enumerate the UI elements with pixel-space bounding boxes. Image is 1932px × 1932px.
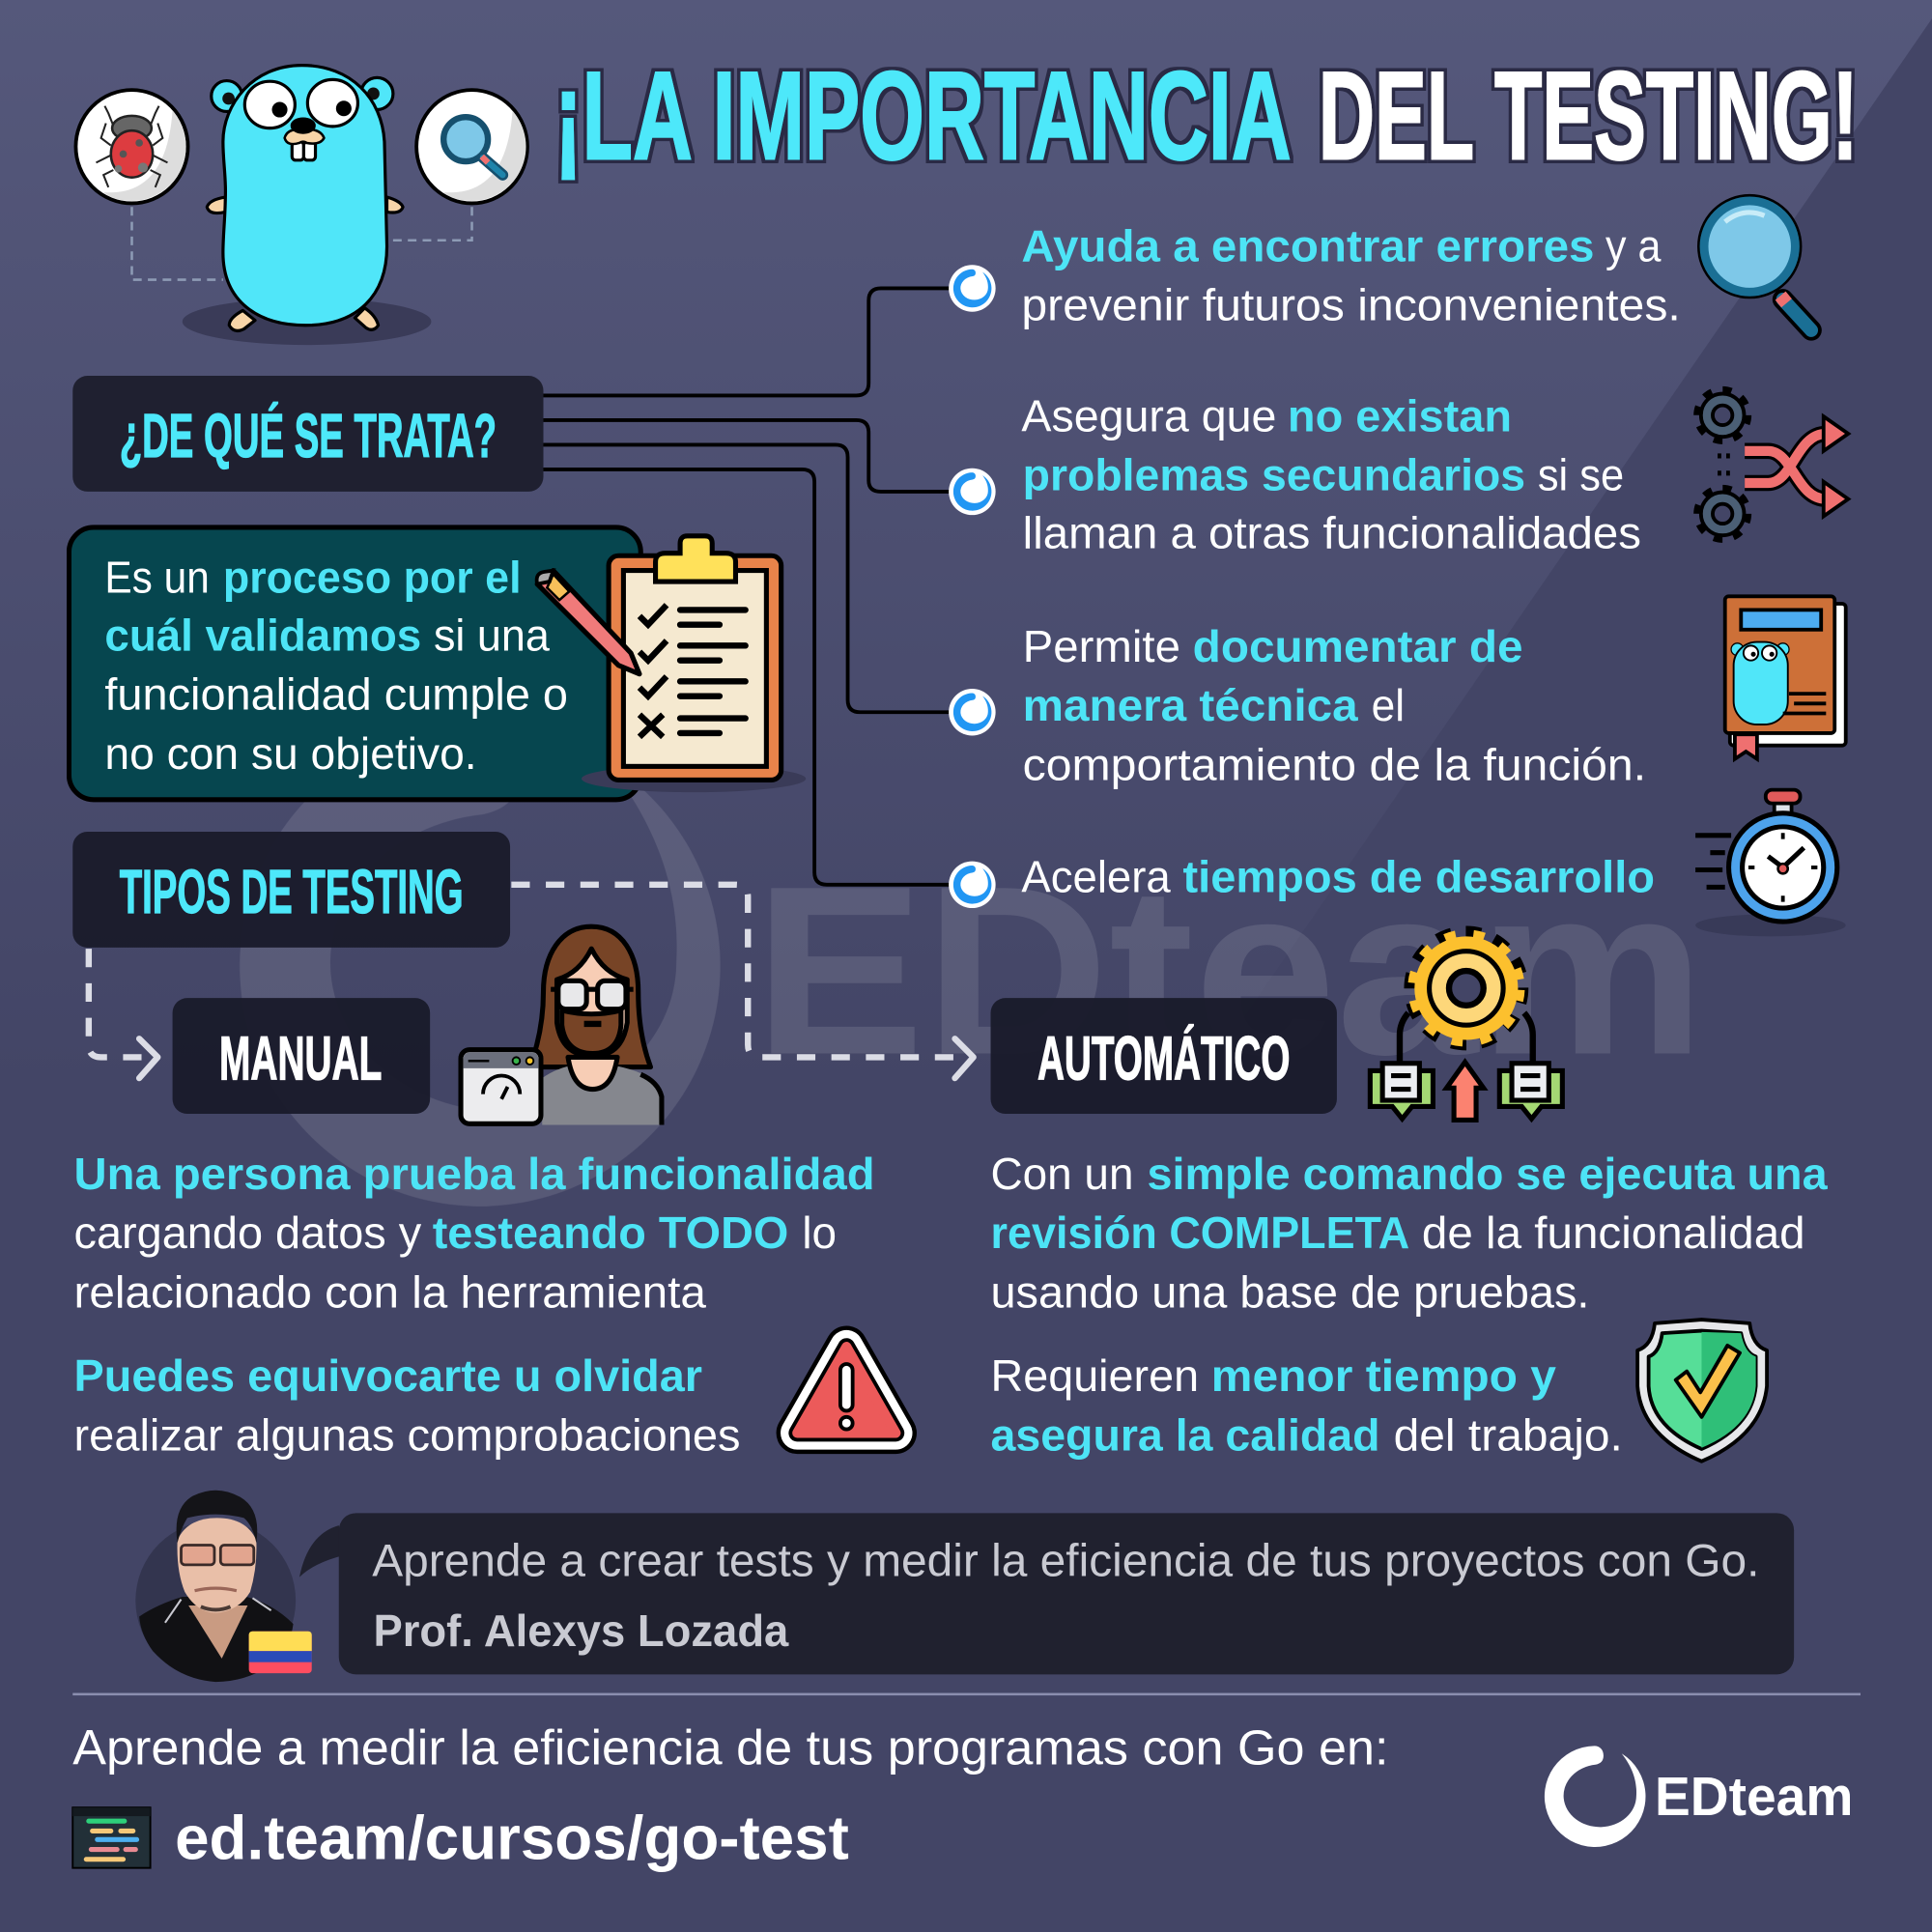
panel: definition: no con su objetivo. xyxy=(104,728,477,779)
text: manual description xyxy=(74,1149,875,1317)
logo: EDteam: EDteam xyxy=(1655,1766,1853,1827)
text: benefit 2: no existan xyxy=(1288,390,1512,440)
heading: tipos de testing: TIPOS DE TESTING xyxy=(120,857,464,926)
text: benefit 1: Ayuda a encontrar errores xyxy=(1021,220,1595,270)
panel: definition: proceso por el xyxy=(223,553,522,603)
connector lines xyxy=(543,288,952,885)
text: automatic description: simple comando se ejecuta una xyxy=(1148,1149,1828,1199)
text: automatic benefit: Requieren xyxy=(991,1350,1199,1401)
text: manual description: cargando datos y xyxy=(74,1208,421,1258)
heading: tipos de testing xyxy=(72,832,510,948)
icon: code window xyxy=(72,1807,151,1868)
bullets xyxy=(949,265,996,908)
icon: shield with check xyxy=(1637,1320,1767,1462)
panel: definition: cuál validamos xyxy=(104,610,421,660)
heading: automático xyxy=(991,998,1337,1114)
text: benefit 3: comportamiento de la función. xyxy=(1023,739,1646,789)
title: ¡LA IMPORTANCIA xyxy=(554,45,1292,186)
text: manual description: testeando TODO xyxy=(433,1208,788,1258)
text: benefit 2: si se xyxy=(1538,450,1624,500)
icon: magnifier in circle xyxy=(416,90,527,203)
text: automatic description: usando una base de pruebas. xyxy=(991,1266,1589,1317)
icon: bug in circle xyxy=(75,90,188,203)
text: manual description: Una persona prueba la funcionalidad xyxy=(74,1149,875,1199)
text: manual description: lo xyxy=(802,1208,837,1258)
text: benefit 1: y a xyxy=(1605,220,1662,270)
course link: ed.team/cursos/go-test xyxy=(175,1804,849,1873)
text: manual description: relacionado con la herramienta xyxy=(74,1266,706,1317)
text: benefit 2: llaman a otras funcionalidades xyxy=(1023,508,1641,558)
icon: magnifier xyxy=(1699,196,1811,330)
text: benefit 3: el xyxy=(1372,680,1405,730)
text: benefit 4: tiempos de desarrollo xyxy=(1182,851,1655,901)
icon: warning triangle xyxy=(797,1347,895,1433)
text: manual risk: Puedes equivocarte u olvidar xyxy=(74,1350,702,1401)
text: benefit 3: manera técnica xyxy=(1023,680,1358,730)
heading: de qué se trata: ¿DE QUÉ SE TRATA? xyxy=(120,401,497,470)
text: benefit 3: Permite xyxy=(1023,621,1180,671)
panel: definition: funcionalidad cumple o xyxy=(104,669,568,720)
callout: professor quote xyxy=(299,1513,1794,1674)
text: manual risk xyxy=(74,1350,741,1460)
avatar: professor xyxy=(135,1491,312,1682)
icon: clipboard with pencil xyxy=(537,536,806,792)
text: automatic benefit xyxy=(991,1350,1623,1460)
text: automatic description: revisión COMPLETA xyxy=(991,1208,1409,1258)
arrow: tipos to automático xyxy=(511,885,974,1078)
panel: definition: Es un xyxy=(104,553,210,603)
watermark: EDteam logo: EDteam xyxy=(754,837,1705,1105)
icon: gears and shuffle arrows xyxy=(1698,390,1848,538)
callout: professor quote: Prof. Alexys Lozada xyxy=(373,1605,789,1656)
panel: definition: si una xyxy=(434,610,550,660)
heading: manual xyxy=(173,998,430,1114)
text: benefit 1 xyxy=(1021,220,1681,330)
illustration: gopher with bug and magnifier xyxy=(75,66,527,345)
heading: automático: AUTOMÁTICO xyxy=(1037,1023,1290,1093)
icon: book with gopher xyxy=(1725,596,1846,759)
panel: definition xyxy=(69,527,640,800)
text: benefit 1: prevenir futuros inconvenientes. xyxy=(1021,280,1681,330)
icon: stopwatch xyxy=(1695,790,1846,936)
text: benefit 2: Asegura que xyxy=(1021,390,1276,440)
text: benefit 2 xyxy=(1021,390,1641,558)
arrow: tipos to manual xyxy=(89,949,157,1078)
heading: de qué se trata xyxy=(72,376,544,492)
text: automatic description: de la funcionalidad xyxy=(1422,1208,1805,1258)
heading: manual: MANUAL xyxy=(219,1023,382,1093)
text: manual risk: realizar algunas comprobaciones xyxy=(74,1409,741,1460)
text: automatic description xyxy=(991,1149,1828,1317)
gopher xyxy=(207,66,403,330)
callout: professor quote: Aprende a crear tests y medir la eficiencia de tus proyectos con Go. xyxy=(372,1535,1759,1586)
text: automatic benefit: del trabajo. xyxy=(1394,1409,1623,1460)
icon: flag of Colombia xyxy=(249,1632,312,1673)
icon: gear with servers xyxy=(1370,933,1562,1120)
text: benefit 2: problemas secundarios xyxy=(1023,450,1525,500)
text: benefit 3: documentar de xyxy=(1193,621,1523,671)
text: automatic benefit: asegura la calidad xyxy=(991,1409,1380,1460)
call to action text: Aprende a medir la eficiencia de tus programas con Go en: xyxy=(72,1720,1389,1776)
watermark: EDteam logo xyxy=(240,725,1705,1207)
logo: EDteam xyxy=(1545,1746,1853,1847)
text: automatic benefit: menor tiempo y xyxy=(1211,1350,1556,1401)
text: benefit 4: Acelera xyxy=(1021,851,1171,901)
icon: tester person with gauge window xyxy=(461,926,663,1125)
text: automatic description: Con un xyxy=(991,1149,1133,1199)
text: benefit 3 xyxy=(1023,621,1646,789)
